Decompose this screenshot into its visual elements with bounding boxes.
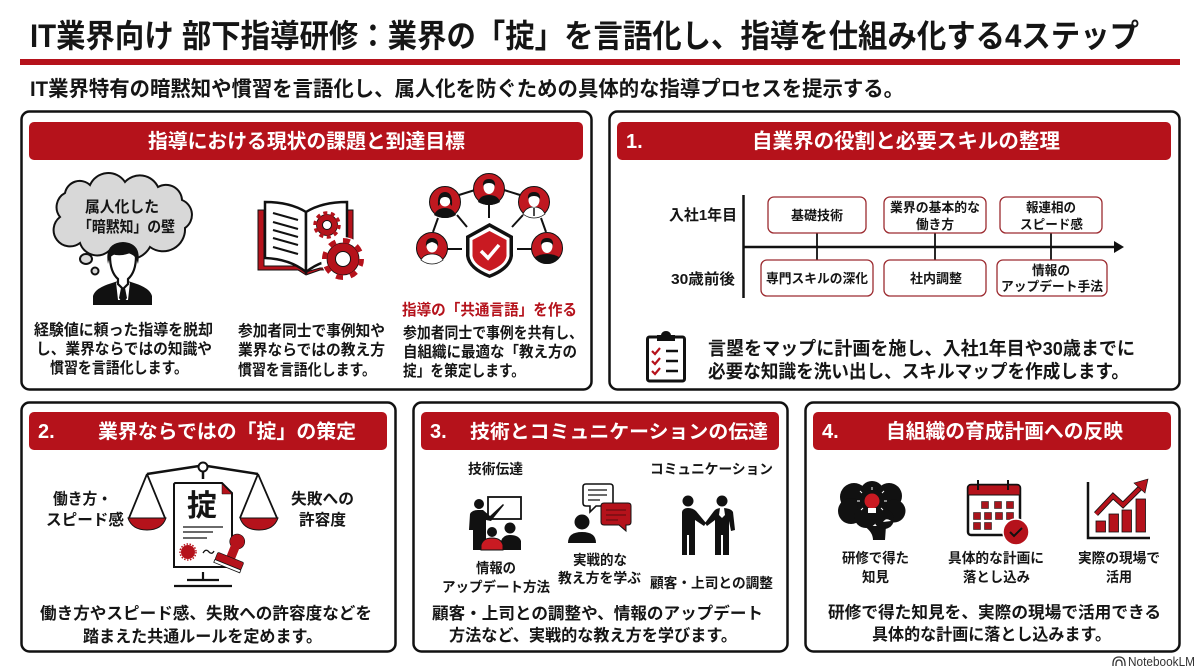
label: practical teaching: 教え方を学ぶ xyxy=(558,570,641,586)
icon: scales and rule document xyxy=(128,462,278,586)
label: tolerance for failure xyxy=(291,489,354,529)
text: common language description xyxy=(403,323,583,380)
label: update method xyxy=(442,560,550,595)
network node: lower left person xyxy=(416,232,448,264)
skill map chart: 社内調整 xyxy=(910,271,962,286)
text: step 1 description: 言曌をマップに計画を施し、入社1年目や30歳までに xyxy=(708,338,1135,359)
text: step 1 description: 必要な知識を洗い出し、スキルマップを作成します。 xyxy=(708,361,1129,382)
panel: step 3 xyxy=(414,402,788,652)
label: tolerance for failure: 失敗への xyxy=(291,489,354,508)
panel heading bar: 指導における現状の課題と到達目標 xyxy=(148,129,465,153)
text: step 3 description xyxy=(432,603,763,645)
step 2 heading bar xyxy=(29,412,387,450)
skill map chart: 情報の xyxy=(1032,263,1070,278)
label: training knowledge xyxy=(842,550,909,585)
text: step 4 description: 研修で得た知見を、実際の現場で活用できる xyxy=(828,603,1161,622)
label: training knowledge: 研修で得た xyxy=(842,550,909,566)
skill map chart: 専門スキルの深化 xyxy=(766,271,868,286)
icon: thought cloud with person: 属人化した xyxy=(85,198,159,216)
icon: open book and gears xyxy=(258,202,365,281)
title underline xyxy=(20,59,1180,65)
text: step 4 description xyxy=(828,603,1161,644)
label: tolerance for failure: 許容度 xyxy=(299,510,346,529)
icon: shield with connected people xyxy=(416,174,562,278)
icon: thought cloud with person: 「暗黙知」の壁 xyxy=(78,217,175,236)
text: step 3 description: 顧客・上司との調整や、情報のアップデート xyxy=(432,603,763,623)
label: update method: アップデート方法 xyxy=(442,579,550,595)
label: technical transfer: 技術伝達 xyxy=(468,461,523,477)
icon: brain with lightbulb xyxy=(838,481,906,540)
icon: calendar with check xyxy=(968,480,1029,545)
text: step 2 description xyxy=(40,603,372,646)
step 1 heading bar: 1. xyxy=(626,131,643,153)
red subheading: common language: 指導の「共通言語」を作る xyxy=(402,300,577,319)
step 2 heading bar: 2. xyxy=(38,421,55,443)
label: work style and speed xyxy=(46,489,124,529)
icon: scales and rule document: 掟 xyxy=(187,490,217,523)
label: workplace use: 活用 xyxy=(1106,569,1132,585)
label: communication: コミュニケーション xyxy=(650,461,773,477)
label: concrete plan: 具体的な計画に xyxy=(948,550,1044,566)
icon: thought cloud with person xyxy=(54,173,192,305)
skill map chart: 30歳前後 xyxy=(671,270,735,288)
skill map chart: 基礎技術 xyxy=(791,208,843,223)
step 2 heading bar: 業界ならではの「掟」の策定 xyxy=(98,420,356,443)
panel heading bar xyxy=(29,122,583,160)
panel: step 1 xyxy=(610,112,1180,390)
panel: current issues and goals xyxy=(22,112,592,390)
network node: upper left person xyxy=(430,186,460,218)
network node: upper right person xyxy=(518,186,550,218)
skill map chart xyxy=(669,195,1124,298)
text: challenge description: 慣習を言語化します。 xyxy=(50,359,188,377)
label: coordination: 顧客・上司との調整 xyxy=(650,575,773,591)
label: training knowledge: 知見 xyxy=(862,569,889,585)
text: challenge description: 経験値に頼った指導を脱却 xyxy=(34,320,213,339)
label: workplace use xyxy=(1078,550,1160,585)
label: concrete plan xyxy=(948,550,1044,585)
text: step 3 description: 方法など、実戦的な教え方を学びます。 xyxy=(449,625,737,645)
label: concrete plan: 落とし込み xyxy=(963,569,1030,585)
icon: growth chart xyxy=(1088,479,1150,538)
text: challenge description: し、業界ならではの知識や xyxy=(36,339,212,358)
text: common language description: 自組織に最適な「教え方の xyxy=(403,342,577,361)
text: common language description: 掟」を策定します。 xyxy=(403,361,525,380)
skill map chart: スピード感 xyxy=(1020,217,1083,232)
text: step 2 description: 働き方やスピード感、失敗への許容度などを xyxy=(40,603,372,623)
skill map chart: 報連相の xyxy=(1026,200,1076,215)
step 3 heading bar xyxy=(421,412,779,450)
label: work style and speed: スピード感 xyxy=(46,510,124,529)
panel: step 2 xyxy=(22,402,396,652)
step 1 heading bar: 自業界の役割と必要スキルの整理 xyxy=(752,130,1060,153)
label: practical teaching: 実戦的な xyxy=(573,552,627,568)
skill map chart: 業界の基本的な xyxy=(890,200,980,215)
panel: step 4 xyxy=(806,402,1180,652)
step 1 heading bar xyxy=(617,122,1171,160)
skill map chart: アップデート手法 xyxy=(1001,279,1103,294)
icon: clipboard checklist xyxy=(648,331,684,381)
step 4 heading bar: 4. xyxy=(822,421,839,443)
label: work style and speed: 働き方・ xyxy=(53,489,112,508)
text: challenge description xyxy=(34,320,213,377)
label: practical teaching xyxy=(558,552,641,586)
text: peer learning description: 業界ならではの教え方 xyxy=(238,340,385,359)
text: step 2 description: 踏まえた共通ルールを定めます。 xyxy=(83,627,322,646)
icon: speech bubbles and person xyxy=(568,484,631,543)
label: update method: 情報の xyxy=(476,560,516,576)
network node: lower right person xyxy=(532,232,562,264)
text: step 4 description: 具体的な計画に落とし込みます。 xyxy=(872,625,1111,644)
text: peer learning description xyxy=(238,321,385,379)
skill map chart: 入社1年目 xyxy=(669,206,737,224)
text: peer learning description: 慣習を言語化します。 xyxy=(238,361,376,379)
text: common language description: 参加者同士で事例を共有し、 xyxy=(403,323,583,342)
step 4 heading bar xyxy=(813,412,1171,450)
icon: handshake xyxy=(682,496,735,555)
step 4 heading bar: 自組織の育成計画への反映 xyxy=(886,419,1123,443)
text: step 1 description xyxy=(708,338,1135,382)
network node: top person xyxy=(474,174,504,205)
footer: NotebookLM mark: NotebookLM xyxy=(1128,655,1195,669)
step 3 heading bar: 3. xyxy=(430,421,447,443)
label: workplace use: 実際の現場で xyxy=(1078,550,1160,566)
subtitle: IT業界特有の暗黙知や慣習を言語化し、属人化を防ぐための具体的な指導プロセスを提示する。 xyxy=(30,77,904,101)
skill map chart: 働き方 xyxy=(916,217,954,232)
step 3 heading bar: 技術とコミュニケーションの伝達 xyxy=(470,420,768,443)
icon: teacher and students xyxy=(469,497,521,550)
text: peer learning description: 参加者同士で事例知や xyxy=(238,321,385,340)
